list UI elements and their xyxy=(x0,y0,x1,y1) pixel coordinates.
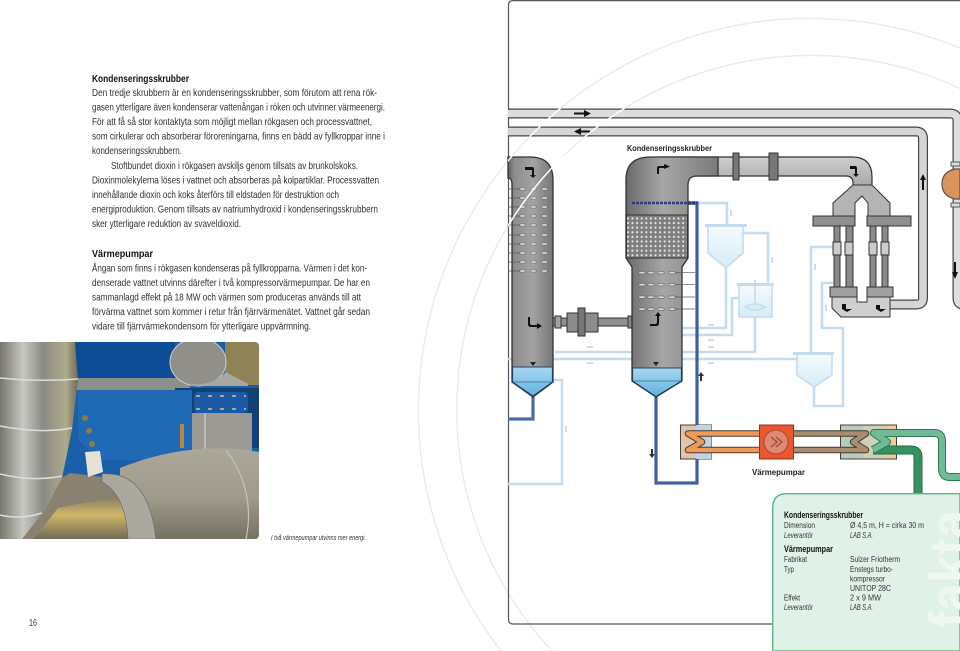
photo: heat pump ducts xyxy=(0,338,259,539)
pump on right pipe xyxy=(942,162,960,207)
text block: scrubber: energiproduktion. Genom tillsats av natriumhydroxid i kondenseringsskrubbern xyxy=(92,204,378,216)
text block: scrubber: innehållande dioxin och koks återförs till eldstaden för destruktion och xyxy=(92,189,339,201)
condensation scrubber vessel xyxy=(626,153,872,397)
facts: heat pumps: Enstegs turbo- xyxy=(850,564,893,574)
large horizontal cylinder xyxy=(120,448,259,539)
small flow marks on light pipes xyxy=(566,210,826,432)
text block: heat pumps xyxy=(92,248,370,332)
text block: heat pumps: denserade vattnet utvinns därefter i två kompressorvärmepumpar. De har en xyxy=(92,277,370,289)
left vessel xyxy=(508,157,553,397)
blue flange xyxy=(194,392,248,413)
photo caption: I två värmepumpar utvinns mer energi. xyxy=(271,533,366,542)
facts: heat pumps: Sulzer Friotherm xyxy=(850,554,900,564)
text block: scrubber: För att få så stor kontaktyta som möjligt mellan rökgasen och processvattnet, xyxy=(92,116,372,128)
text block: scrubber: Dioxinmolekylerna löses i vattnet och absorberas på kolpartiklar. Processvatten xyxy=(92,174,379,186)
facts: scrubber: Ø 4,5 m, H = cirka 30 m xyxy=(850,520,924,530)
connecting duct between vessels xyxy=(553,308,633,336)
white tag xyxy=(85,451,103,477)
top right cylinder xyxy=(170,338,259,386)
compressor xyxy=(760,425,794,459)
text block: scrubber: som cirkulerar och absorberar föroreningarna, finns en bädd av fyllkroppar inne i xyxy=(92,132,385,142)
facts: heat pumps xyxy=(784,544,900,612)
facts: heat pumps: Leverantör xyxy=(784,602,814,612)
text block: heat pumps: sammanlagd effekt på 18 MW och värmen som produceras används till att xyxy=(92,292,361,304)
text block: heat pumps: vidare till fjärrvärmekondensorn för ytterligare uppvärmning. xyxy=(92,322,311,332)
facts: heat pumps: Fabrikat xyxy=(784,554,807,564)
facts: heat pumps: 2 x 9 MW xyxy=(850,592,882,602)
facts: scrubber: Leverantör xyxy=(784,530,814,540)
text block: heat pumps: Värmepumpar xyxy=(92,248,153,260)
page number: 16 xyxy=(29,617,37,629)
heat exchanger right xyxy=(840,425,896,459)
text block: scrubber: kondenseringsskrubbern. xyxy=(92,146,182,157)
facts: heat pumps: Värmepumpar xyxy=(784,544,833,554)
brass valve xyxy=(180,424,184,448)
settling tank 1 xyxy=(705,224,747,268)
text block: scrubber: Den tredje skrubbern är en kondenseringsskrubber, som förutom att rena rök- xyxy=(92,88,377,99)
separator branching assembly xyxy=(813,185,911,317)
text block: heat pumps: förvärma vattnet som kommer i retur från fjärrvärmenätet. Vattnet går sedan xyxy=(92,306,370,318)
panel: facts xyxy=(773,494,960,651)
facts: heat pumps: UNITOP 28C xyxy=(850,583,891,593)
cloth wrapped section xyxy=(22,473,117,539)
facts: heat pumps: Typ xyxy=(784,564,794,574)
settling tank 2 xyxy=(793,352,834,387)
large silver duct xyxy=(0,342,78,539)
facts: heat pumps: kompressor xyxy=(850,574,885,584)
text block: heat pumps: Ångan som finns i rökgasen kondenseras på fyllkropparna. Värmen i det kon- xyxy=(92,262,367,274)
facts: scrubber: Dimension xyxy=(784,520,815,530)
mixing tank xyxy=(737,280,774,317)
flow arrow on blue return pipe xyxy=(698,372,704,381)
process diagram xyxy=(508,110,960,493)
diagram label: scrubber: Kondenseringsskrubber xyxy=(627,143,713,153)
diagram frame xyxy=(508,1,960,624)
district heating pipes xyxy=(873,433,960,493)
light blue water pipes xyxy=(508,203,843,484)
facts: heat pumps: Effekt xyxy=(784,592,800,602)
refrigerant circuit xyxy=(688,434,866,450)
pipe end ring xyxy=(102,474,156,539)
arrows on top pipes xyxy=(574,110,958,279)
heat exchanger left xyxy=(680,425,712,459)
flow arrow on blue supply pipe xyxy=(649,449,655,458)
arcs crossing the pipes xyxy=(508,108,626,228)
heat pump unit xyxy=(680,425,960,493)
facts: scrubber: Kondenseringsskrubber xyxy=(784,510,863,520)
side bolts xyxy=(82,415,95,447)
text block: scrubber xyxy=(92,73,385,230)
facts: scrubber xyxy=(784,510,924,540)
text block: scrubber: gasen ytterligare även kondenserar vattenångan i röken och utvinner värmeenergi. xyxy=(92,102,385,114)
diagram label: heat pumps: Värmepumpar xyxy=(752,467,806,477)
facts: scrubber: LAB S.A. xyxy=(850,530,873,540)
gold pipe section xyxy=(34,495,130,539)
facts: heat pumps: LAB S.A. xyxy=(850,602,873,612)
vertical column xyxy=(192,413,252,452)
text block: scrubber: sker ytterligare reduktion av svaveldioxid. xyxy=(92,219,241,230)
text block: scrubber: Kondenseringsskrubber xyxy=(92,73,189,85)
decorative circles xyxy=(418,18,960,651)
text block: scrubber: Stoftbundet dioxin i rökgasen avskiljs genom tillsats av brunkolskoks. xyxy=(111,161,358,172)
top pipes xyxy=(508,114,960,305)
dark blue water pipes xyxy=(508,203,697,483)
